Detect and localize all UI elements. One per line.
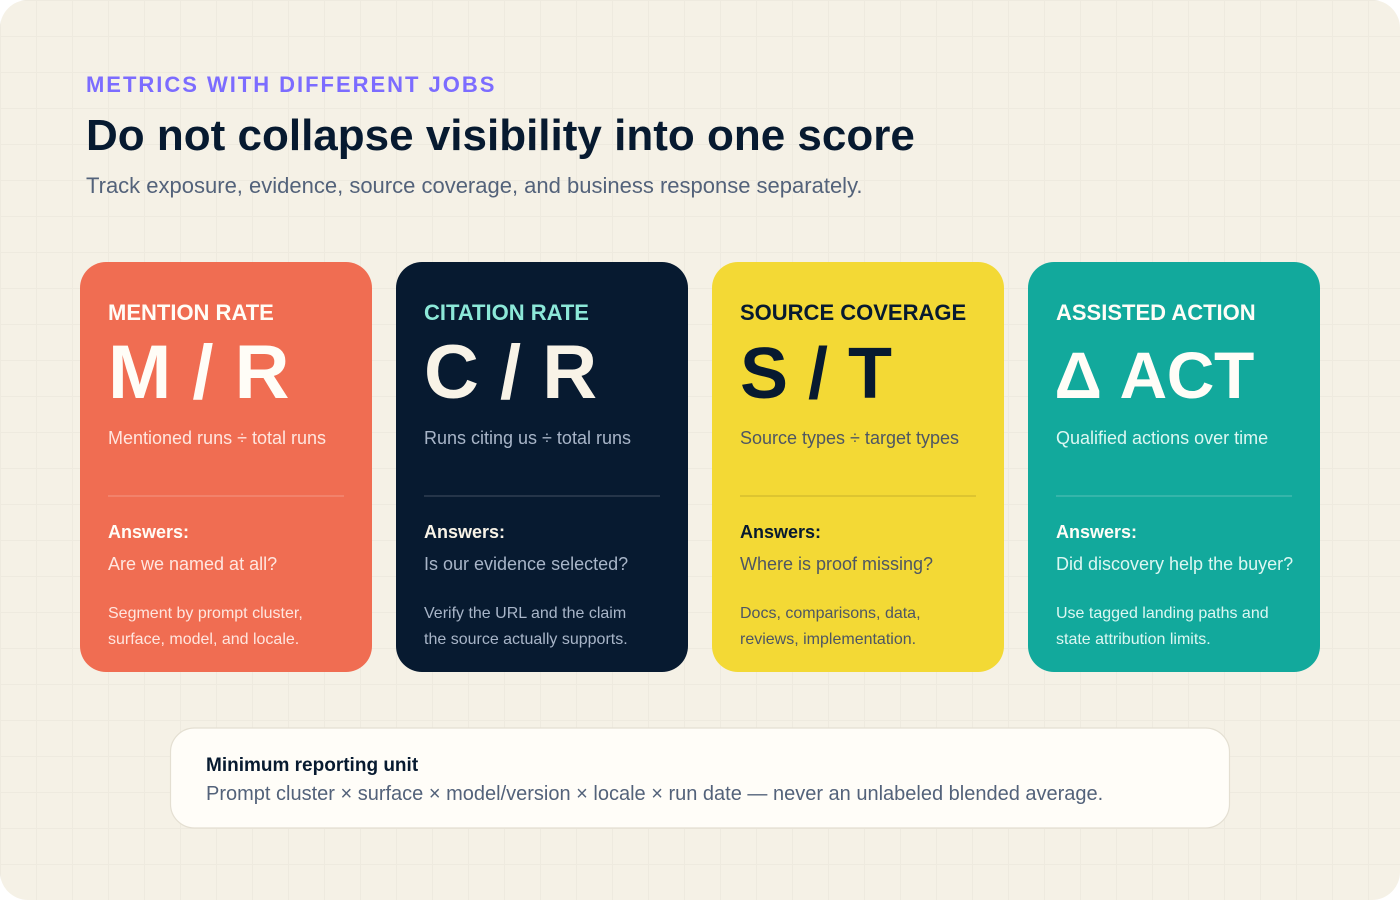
note: Verify the URL and the claim [424, 605, 626, 622]
note: state attribution limits. [1056, 631, 1211, 648]
panel: mention rate [80, 262, 372, 672]
subtitle: Track exposure, evidence, source coverage, and business response separately. [86, 173, 863, 198]
panel: citation rate [396, 262, 688, 672]
note: the source actually supports. [424, 631, 628, 648]
answer question: Did discovery help the buyer? [1056, 554, 1293, 574]
formula: S / T [740, 334, 892, 414]
callout: minimum reporting unit [170, 728, 1230, 828]
definition: Qualified actions over time [1056, 428, 1268, 448]
answers label: Answers: [740, 522, 821, 542]
answer question: Where is proof missing? [740, 554, 933, 574]
note: reviews, implementation. [740, 631, 916, 648]
definition: Mentioned runs ÷ total runs [108, 428, 326, 448]
formula: Δ ACT [1054, 338, 1254, 412]
answers label: Answers: [1056, 522, 1137, 542]
formula: M / R [108, 330, 290, 415]
card label: CITATION RATE [424, 300, 589, 325]
definition: Source types ÷ target types [740, 428, 959, 448]
panel: assisted action [1028, 262, 1320, 672]
title: Do not collapse visibility into one score [86, 111, 915, 160]
card label: ASSISTED ACTION [1056, 300, 1256, 325]
note: Docs, comparisons, data, [740, 605, 921, 622]
callout heading: Minimum reporting unit [206, 755, 419, 776]
card label: MENTION RATE [108, 300, 274, 325]
note: surface, model, and locale. [108, 631, 299, 648]
answers label: Answers: [424, 522, 505, 542]
answers label: Answers: [108, 522, 189, 542]
answer question: Are we named at all? [108, 554, 277, 574]
header [86, 72, 915, 198]
answer question: Is our evidence selected? [424, 554, 628, 574]
callout text: Prompt cluster × surface × model/version × locale × run date — never an unlabeled blended average. [206, 783, 1103, 805]
eyebrow: METRICS WITH DIFFERENT JOBS [86, 72, 496, 97]
formula: C / R [424, 330, 597, 415]
note: Segment by prompt cluster, [108, 605, 303, 622]
panel: source coverage [712, 262, 1004, 672]
card label: SOURCE COVERAGE [740, 300, 966, 325]
definition: Runs citing us ÷ total runs [424, 428, 631, 448]
note: Use tagged landing paths and [1056, 605, 1269, 622]
